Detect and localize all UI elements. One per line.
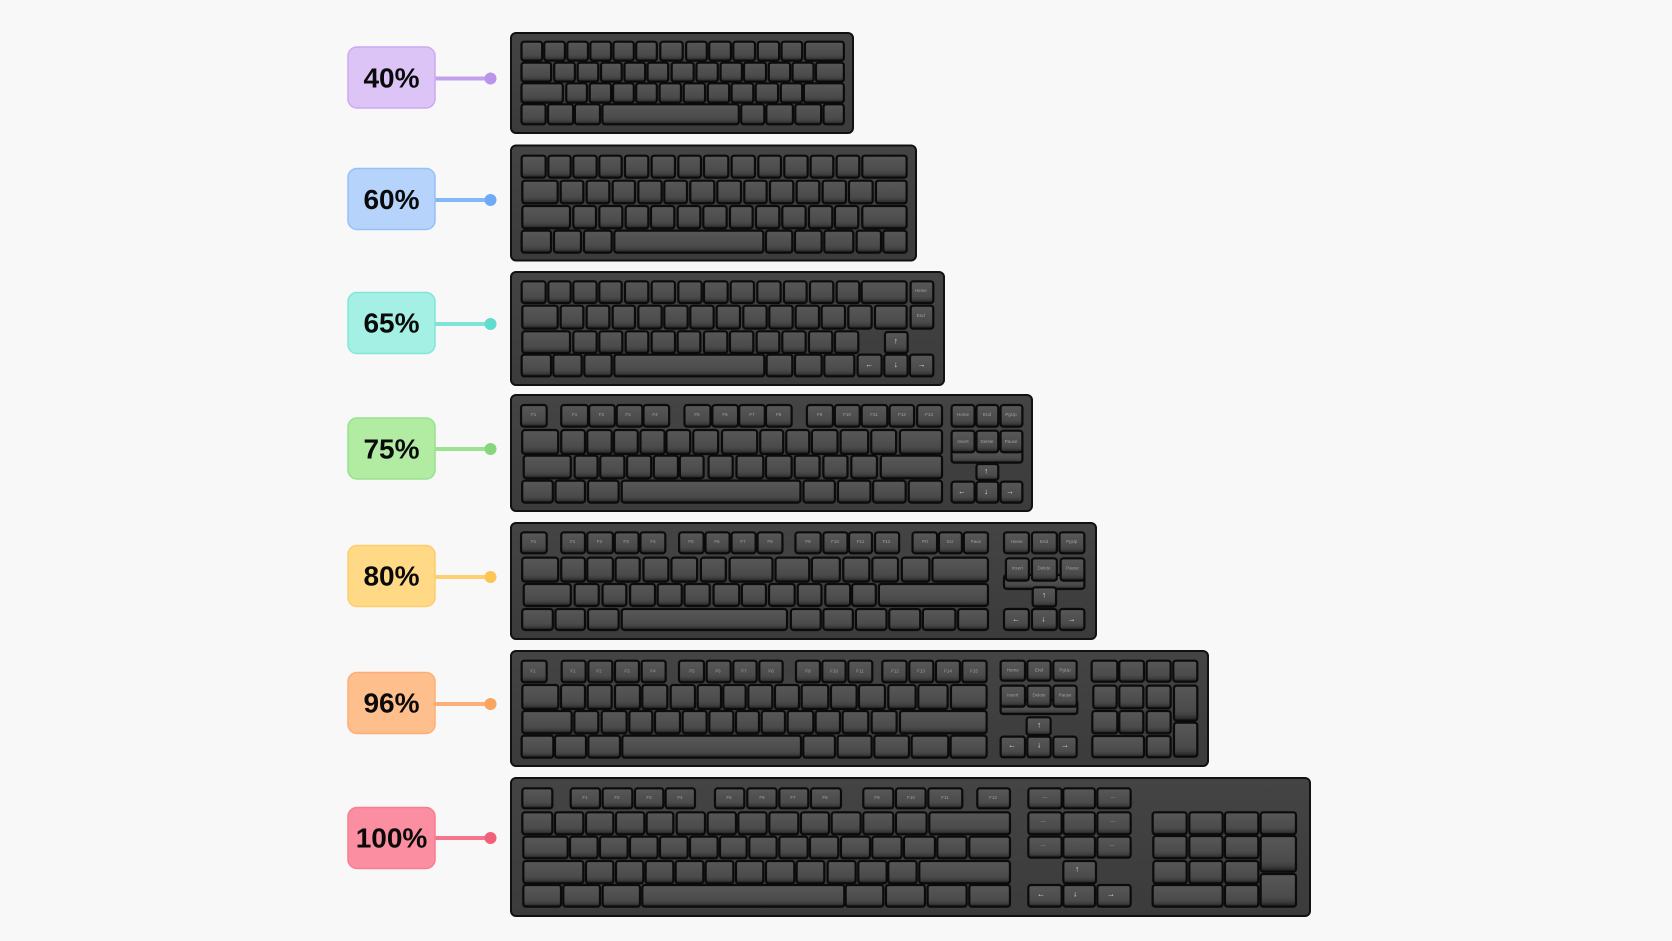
key legends 100%: — [1041, 818, 1046, 824]
key legends 65%: ↑ [894, 336, 898, 346]
key legends 80%: Paus [971, 539, 982, 544]
key legends 96%: F14 [944, 668, 952, 674]
keyboard: 60% [511, 146, 916, 260]
badge 60% [348, 168, 435, 230]
key legends 65%: ← [865, 360, 873, 369]
key legends 96%: ← [1008, 740, 1016, 750]
key legends 65%: End [917, 313, 925, 318]
key legends 75%: End [983, 412, 991, 417]
key legends 75%: PgUp [1005, 412, 1017, 417]
key legends 75%: F7 [749, 412, 755, 417]
main keys 100% [522, 788, 1010, 907]
navigation and numpad keys 96% [1001, 661, 1197, 757]
key legends 100%: ↓ [1073, 890, 1077, 898]
key legends 80%: F3 [623, 539, 629, 544]
badge 75% [348, 418, 435, 479]
key legends 80%: F9 [805, 539, 811, 544]
badge 40% [348, 47, 435, 108]
key legends 100%: F11 [941, 795, 949, 800]
key legends 75%: F3 [625, 412, 631, 417]
key legends 80%: ↑ [1042, 590, 1046, 600]
key legends 100%: F4 [677, 795, 683, 800]
key legends 80%: End [1040, 539, 1048, 544]
key legends 100%: F8 [822, 795, 828, 800]
key legends 96%: F9 [805, 668, 811, 674]
badge 96% [348, 672, 435, 734]
label: 96% [348, 672, 496, 734]
key legends 75%: Pause [1005, 439, 1018, 444]
key legends 80%: F2 [597, 539, 603, 544]
key legends 75%: F13 [925, 412, 933, 417]
key legends 100%: F5 [726, 795, 732, 800]
label: 60% [348, 168, 496, 230]
key legends 96%: → [1061, 740, 1069, 750]
key legends 65% [865, 288, 927, 369]
key legends 80%: Prt [922, 539, 929, 544]
case 60% [511, 146, 916, 260]
label: 75% [348, 418, 496, 479]
key legends 96%: F12 [891, 668, 899, 674]
key legends 100%: F3 [646, 795, 652, 800]
key legends 80%: Insert [1012, 566, 1024, 570]
key legends 80%: F1 [570, 539, 576, 544]
key legends 80%: Home [1011, 539, 1023, 544]
label: 80% [348, 546, 496, 606]
key legends 80%: F1 [531, 539, 537, 544]
case 80% [511, 523, 1096, 639]
connector 65% [434, 318, 496, 330]
keyboard: 96% [511, 651, 1208, 766]
keys 65% [522, 281, 933, 376]
key legends 96%: F15 [970, 668, 978, 674]
percent 100%: 100% [356, 822, 427, 854]
key legends 75%: F12 [898, 412, 906, 417]
key legends 75%: Home [957, 412, 969, 417]
key legends 96%: F1 [530, 668, 536, 674]
key legends 100%: F1 [582, 795, 588, 800]
percent 40%: 40% [363, 62, 420, 94]
key legends 100%: — [1111, 818, 1116, 824]
key legends 96%: Home [1007, 668, 1019, 672]
key legends 75%: ↓ [984, 487, 988, 496]
key legends 75% [531, 412, 1018, 496]
navigation and numpad keys 100% [1028, 788, 1296, 907]
key legends 80%: Pause [1066, 566, 1079, 570]
case 40% [511, 33, 853, 133]
key legends 80% [531, 539, 1079, 624]
key legends 80%: F11 [857, 539, 865, 544]
connector 96% [434, 698, 496, 710]
keyboard: 75% [511, 395, 1032, 511]
key legends 80%: PgUp [1066, 539, 1078, 544]
keys 80% [521, 532, 1084, 630]
label: 65% [348, 292, 496, 354]
percent 80%: 80% [363, 560, 420, 592]
key legends 96%: PgUp [1059, 668, 1071, 672]
key legends 75%: ↑ [984, 466, 988, 476]
key legends 75%: → [1006, 487, 1014, 496]
key legends 100%: — [1110, 842, 1115, 848]
key legends 65%: → [918, 360, 926, 369]
key legends 75%: F4 [652, 412, 658, 417]
percent 65%: 65% [363, 308, 420, 338]
badge 100% [348, 808, 435, 868]
key legends 75%: F10 [843, 412, 851, 417]
key legends 75%: F6 [722, 412, 728, 417]
key legends 100%: ← [1037, 890, 1045, 898]
key legends 96%: Delete [1032, 692, 1046, 698]
key legends 96%: Insert [1007, 692, 1019, 698]
key legends 75%: F1 [531, 412, 537, 417]
key legends 75%: F5 [694, 412, 700, 417]
key legends 100%: · [1074, 842, 1076, 848]
key legends 80%: F8 [767, 539, 773, 544]
percent 96%: 96% [363, 688, 420, 718]
key legends 80%: ← [1012, 614, 1020, 624]
key legends 96%: F8 [768, 668, 774, 674]
key legends 100%: F2 [614, 795, 620, 800]
keyboard: 80% [511, 523, 1096, 639]
key legends 80%: F10 [831, 539, 839, 544]
key legends 100%: F10 [907, 795, 915, 800]
keyboard: 100% [511, 778, 1310, 916]
key legends 75%: ← [958, 487, 966, 496]
case 96% [511, 651, 1208, 766]
label: 100% [348, 808, 496, 868]
key legends 100%: F12 [989, 795, 997, 800]
key legends 96%: End [1035, 668, 1043, 672]
key legends 96%: F11 [856, 668, 864, 674]
case 65% [511, 272, 944, 385]
key legends 96%: F4 [650, 668, 656, 674]
key legends 75%: F11 [870, 412, 878, 417]
key legends 80%: ↓ [1041, 614, 1045, 624]
key legends 80%: F7 [740, 539, 746, 544]
key legends 75%: Delete [980, 439, 994, 444]
key legends 100%: F7 [790, 795, 796, 800]
key legends 100%: — [1041, 842, 1046, 848]
key legends 80%: F6 [714, 539, 720, 544]
percent 75%: 75% [363, 434, 420, 464]
keys 75% [521, 405, 1022, 503]
key legends 96%: ↓ [1037, 740, 1041, 750]
keys 40% [521, 42, 844, 124]
key legends 96%: F3 [624, 668, 630, 674]
key legends 96%: F7 [741, 668, 747, 674]
case 75% [511, 395, 1032, 511]
key legends 80%: → [1068, 614, 1076, 624]
connector 60% [434, 194, 496, 206]
case 100% [511, 778, 1310, 916]
key legends 65%: Home [915, 288, 927, 293]
key legends 75%: F1 [572, 412, 578, 417]
key legends 75%: F9 [817, 412, 823, 417]
key legends 100% [582, 795, 1116, 898]
key legends 65%: ↓ [894, 360, 898, 369]
key legends 96%: F1 [570, 668, 576, 674]
key legends 96%: F10 [830, 668, 838, 674]
key legends 96%: F6 [715, 668, 721, 674]
label: 40% [348, 47, 496, 108]
percent 60%: 60% [363, 184, 420, 215]
connector 75% [434, 443, 496, 455]
key legends 96%: ↑ [1037, 720, 1041, 730]
key legends 100%: — [1043, 795, 1048, 800]
key legends 75%: F8 [776, 412, 782, 417]
main keys 96% [522, 661, 987, 758]
key legends 96%: F5 [689, 668, 695, 674]
key legends 100%: ↑ [1075, 864, 1079, 874]
key legends 75%: F2 [599, 412, 605, 417]
key legends 100%: F9 [874, 795, 880, 800]
connector 80% [434, 571, 496, 583]
key legends 96%: F2 [596, 668, 602, 674]
keys 60% [522, 156, 907, 253]
key legends 100%: → [1107, 890, 1115, 898]
connector 100% [434, 832, 496, 844]
key legends 96%: F13 [917, 668, 925, 674]
key legends 100%: F6 [759, 795, 765, 800]
key legends 80%: Scr [947, 539, 954, 544]
key legends 80%: F12 [883, 539, 891, 544]
keyboard: 65% [511, 272, 944, 385]
key legends 80%: Delete [1037, 566, 1051, 570]
key legends 96% [530, 668, 1072, 750]
key legends 100%: — [1111, 795, 1116, 800]
key legends 80%: F5 [688, 539, 694, 544]
connector 40% [434, 72, 496, 84]
badge 80% [348, 546, 435, 606]
badge 65% [348, 292, 435, 354]
key legends 96%: Pause [1059, 692, 1072, 698]
keyboard: 40% [511, 33, 853, 133]
key legends 75%: Insert [957, 439, 969, 444]
key legends 80%: F4 [650, 539, 656, 544]
